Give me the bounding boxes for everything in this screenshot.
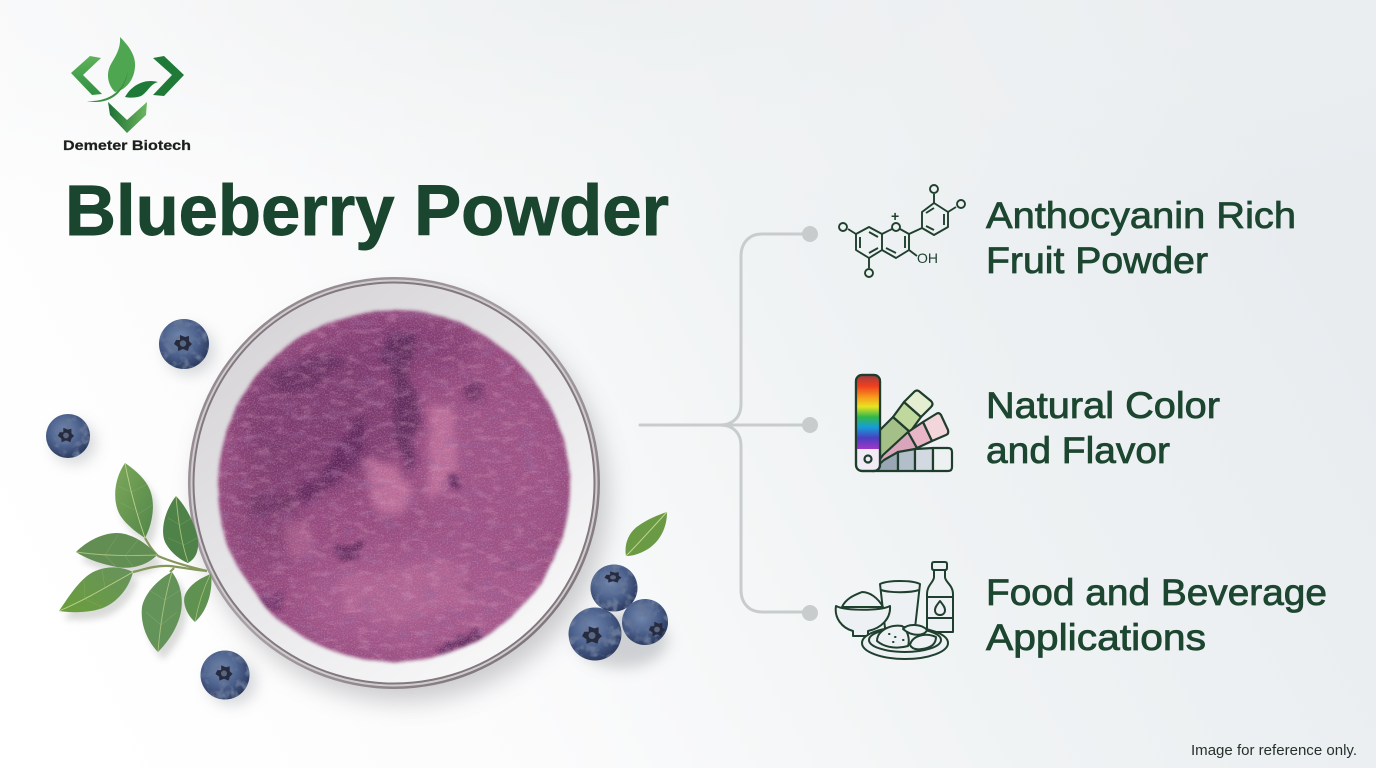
green swatch: [878, 390, 932, 466]
bowl with powder: [842, 592, 883, 607]
connector dots: [802, 226, 818, 621]
pink swatch: [878, 413, 948, 468]
label: Anthocyanin Rich Fruit Powder: Fruit Powder: [986, 239, 1208, 281]
logo: Demeter Biotech: [63, 37, 191, 153]
label: Anthocyanin Rich Fruit Powder: [986, 194, 1296, 281]
food on plate: [877, 626, 909, 648]
label: Natural Color and Flavor: and Flavor: [986, 429, 1170, 471]
label: Natural Color and Flavor: Natural Color: [986, 384, 1220, 426]
grey swatch: [872, 448, 952, 471]
powder dark folds: [245, 335, 488, 520]
blueberry bottom: [200, 650, 257, 705]
blueberry cluster: [568, 564, 668, 668]
blueberry top: [159, 319, 215, 375]
leaf near bowl: [163, 496, 198, 563]
bottle: [927, 562, 953, 632]
footnote: Image for reference only.: [1191, 742, 1357, 759]
logo wordmark: Demeter Biotech: [63, 138, 191, 153]
molecule labels: +: [891, 208, 899, 224]
label: Anthocyanin Rich Fruit Powder: Anthocyanin Rich: [986, 194, 1296, 236]
label: Natural Color and Flavor: [986, 384, 1220, 471]
connector lines: [640, 234, 810, 612]
plate: [862, 627, 948, 659]
icon: color swatch fan: [856, 375, 952, 471]
bowl of blueberry powder: [188, 277, 608, 702]
powder dark flecks: [258, 474, 518, 656]
label: Food and Beverage Applications: Food and Beverage: [986, 571, 1327, 613]
leaf bottom: [142, 572, 182, 652]
leaf right: [626, 512, 667, 556]
leaf sprig: [59, 463, 211, 660]
glass: [880, 581, 920, 628]
icon: food and beverage: [836, 562, 953, 659]
leaf left middle: [76, 533, 157, 568]
title: Blueberry Powder: [65, 172, 669, 251]
leaf upper: [115, 463, 153, 538]
leaf side veins: [84, 484, 197, 625]
label: Food and Beverage Applications: [986, 571, 1327, 658]
powder: [216, 308, 573, 665]
label: Food and Beverage Applications: Applications: [986, 616, 1206, 658]
icon: anthocyanin molecule: [839, 185, 965, 277]
leaf small: [184, 574, 211, 622]
molecule labels: OH: [917, 250, 938, 266]
leaf lower left: [59, 567, 133, 612]
blueberry left: [46, 414, 96, 464]
rainbow strip: [856, 375, 880, 471]
powder light wedges: [285, 405, 480, 625]
molecule labels: [891, 208, 938, 266]
